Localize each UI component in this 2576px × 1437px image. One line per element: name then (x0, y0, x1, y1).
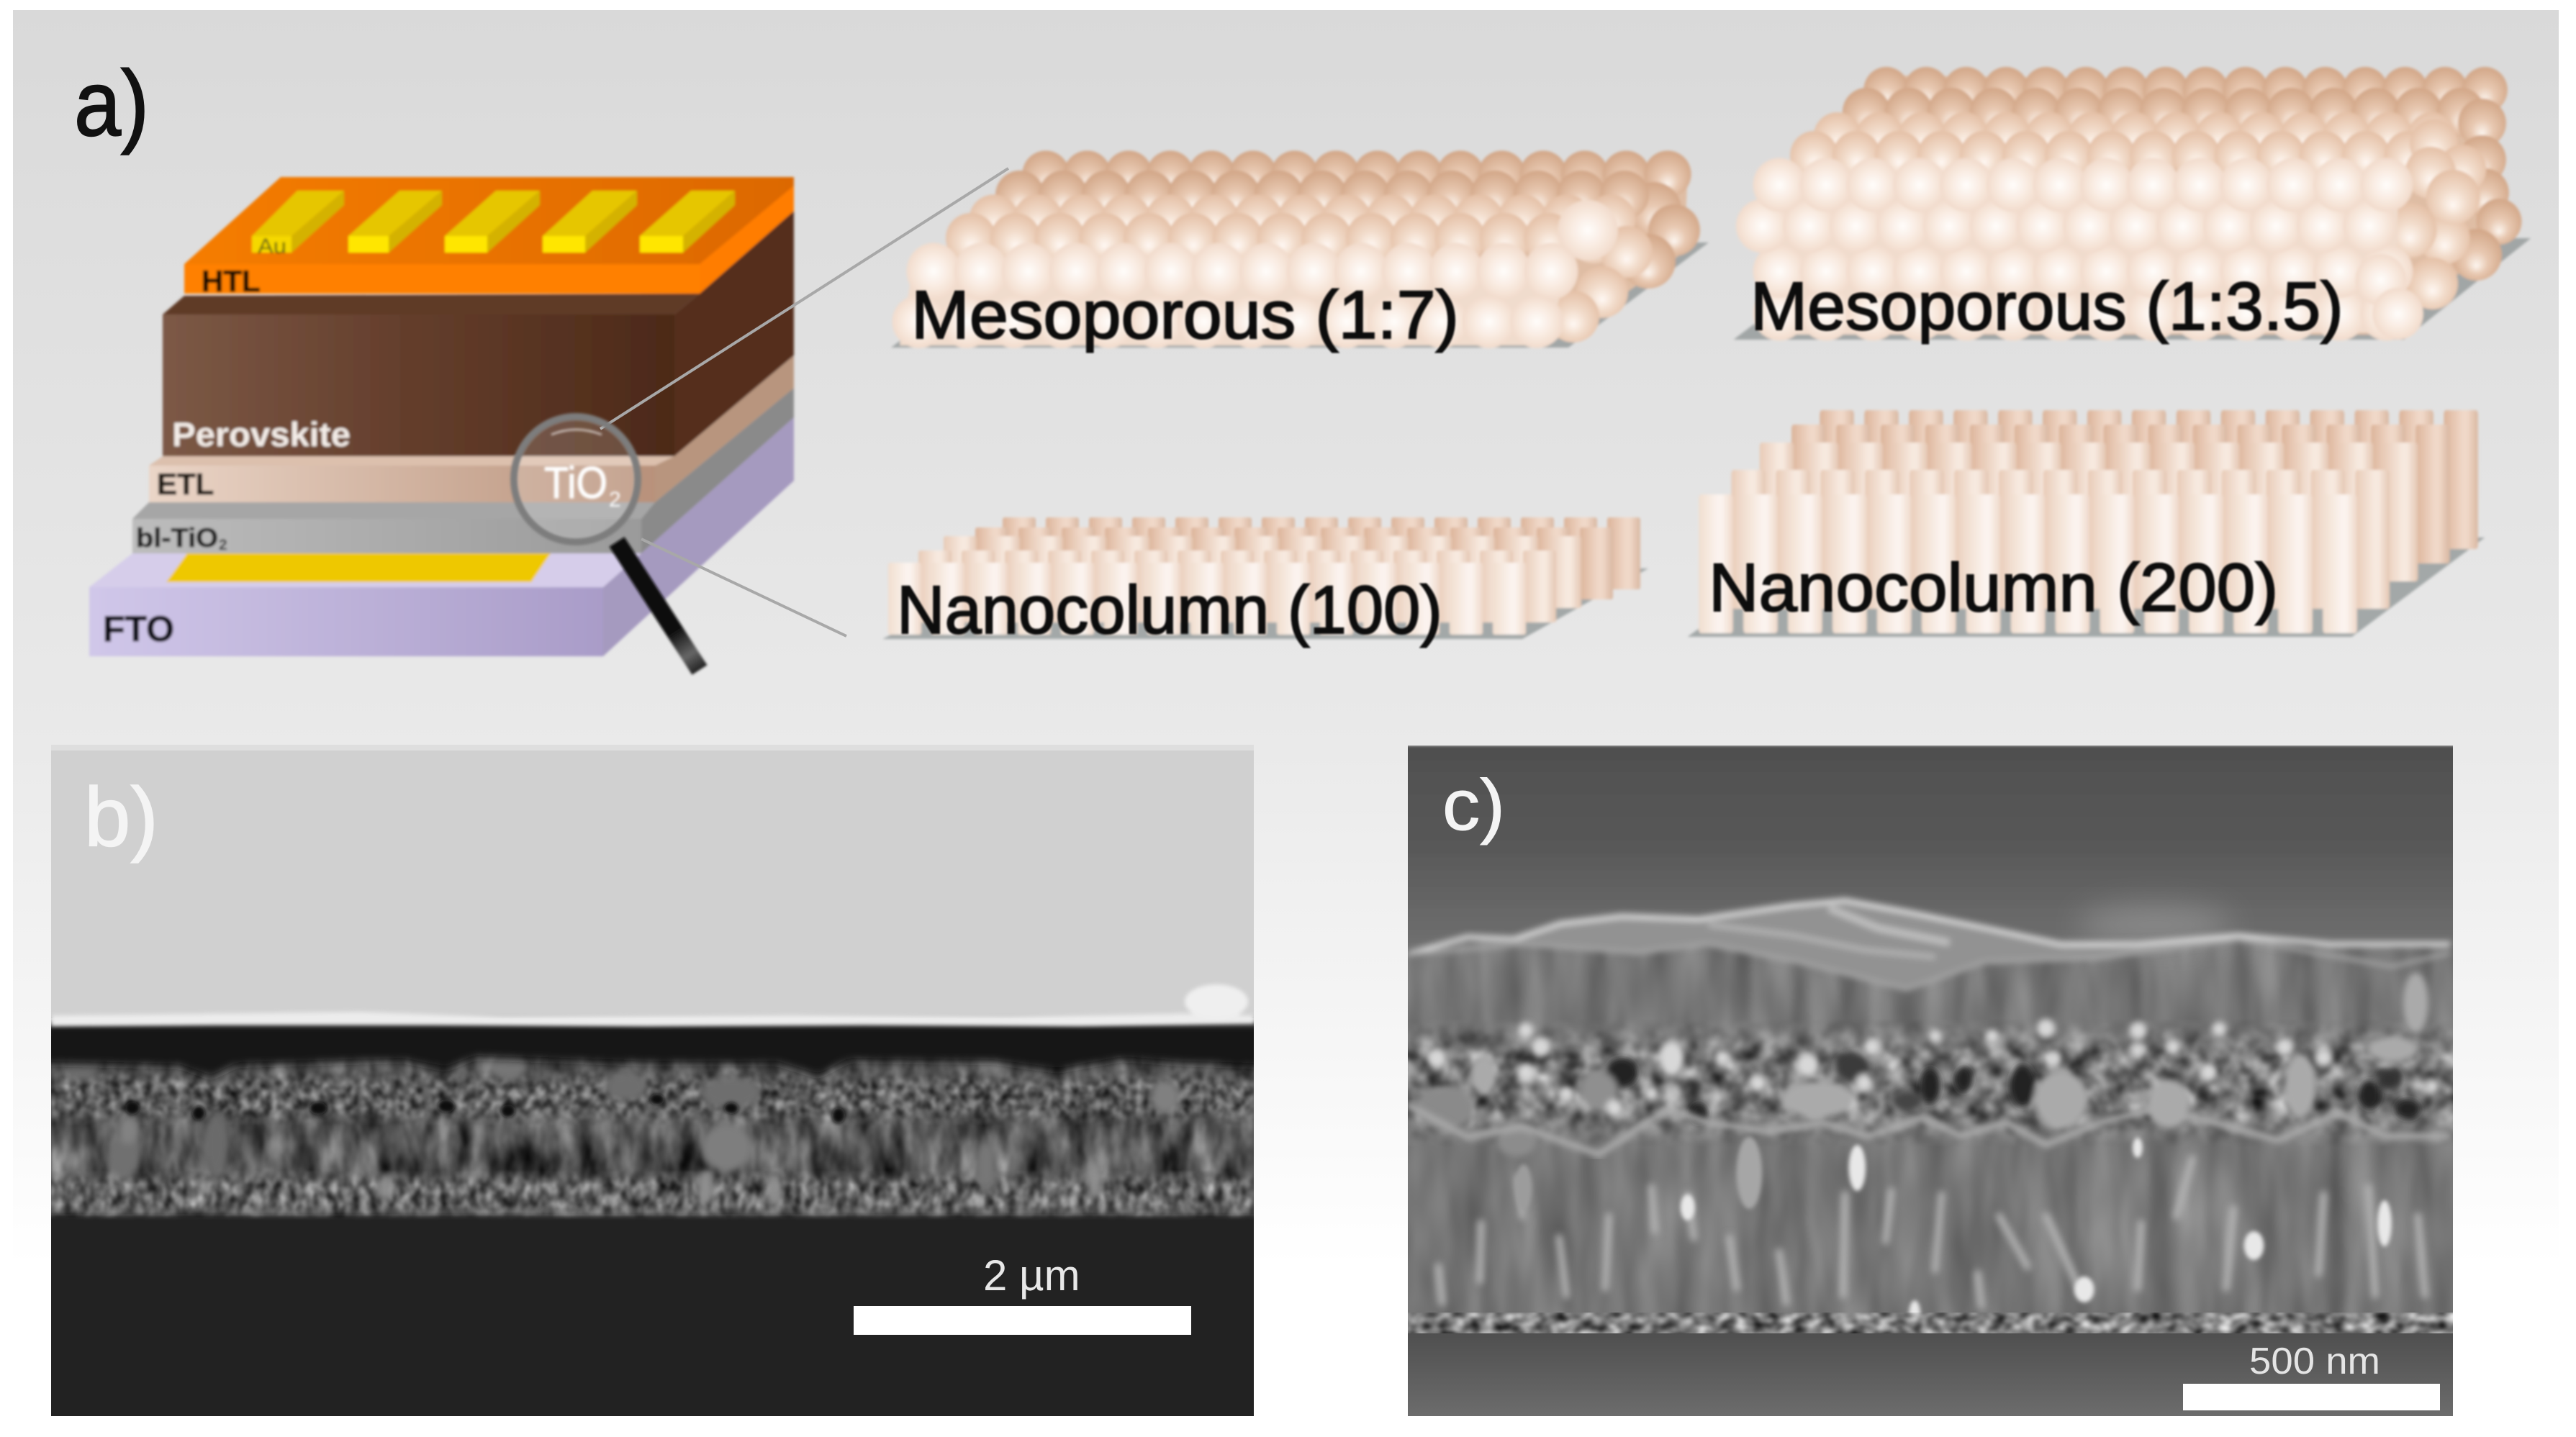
panel label b: b) (84, 770, 158, 863)
bright glow above ridge (2077, 906, 2233, 943)
icon: magnifying glass over TiO2 (514, 417, 700, 670)
layer labels: Perovskite (172, 415, 351, 453)
morphology: Nanocolumn 100 (882, 517, 1648, 648)
dark void band (43, 1022, 1267, 1078)
particle layer (1368, 973, 2503, 1156)
base film (1368, 892, 2503, 1338)
SEM grain (1408, 940, 2453, 1313)
scale label 500 nm: 500 nm (2249, 1341, 2380, 1382)
morphology: Mesoporous 1:7 (891, 150, 1709, 353)
magnifier callout lines (600, 168, 1008, 636)
layer labels: bl-TiO (136, 523, 218, 553)
dark substrate (43, 1216, 1267, 1432)
gold top electrodes (252, 191, 735, 253)
panel a: device schematic and TiO2 morphologies (74, 52, 2531, 670)
morphology: Nanocolumn 200 (1688, 410, 2485, 637)
panel b: SEM cross-section (43, 745, 1267, 1432)
layer: HTL (184, 177, 794, 294)
label: Nanocolumn (100) (897, 572, 1442, 648)
substrate (1368, 1333, 2503, 1416)
bottom gold contact (166, 553, 551, 582)
scale bar c (2183, 1384, 2440, 1410)
layer: FTO (89, 417, 794, 656)
scale label 2 µm: 2 µm (983, 1251, 1080, 1300)
label: Nanocolumn (200) (1709, 549, 2278, 625)
layer labels: 2 (219, 537, 227, 553)
zigzag interface line (1407, 1105, 2451, 1154)
icon: magnifying glass over TiO2: 2 (609, 488, 621, 512)
upper dark vacuum (1368, 745, 2503, 964)
morphology: Mesoporous 1:3.5 (1733, 67, 2531, 344)
layer labels: FTO (103, 609, 174, 649)
beaded compact layer (1368, 1313, 2503, 1336)
upper vacuum region (51, 745, 1254, 1018)
device layer stack (89, 177, 794, 656)
label: Mesoporous (1:3.5) (1750, 268, 2344, 344)
layer labels (103, 235, 351, 649)
layer: bl-TiO2 (132, 388, 794, 553)
top surface ridge (1407, 900, 2451, 989)
icon: magnifying glass over TiO2: TiO (544, 458, 607, 508)
panel label a: a) (74, 52, 149, 155)
label: Mesoporous (1:7) (911, 277, 1459, 353)
layer labels: Au (258, 235, 286, 258)
columnar grain streaks (1439, 1159, 2425, 1306)
panel label c: c) (1442, 765, 1505, 846)
SEM grain layers (51, 1052, 1254, 1220)
bright top rim (51, 984, 1254, 1026)
layer labels: HTL (202, 264, 261, 298)
layer: ETL (149, 355, 794, 502)
layer: perovskite (163, 211, 794, 456)
panel c: SEM cross-section (1368, 745, 2503, 1416)
layer labels: ETL (157, 467, 214, 501)
scale bar b (854, 1306, 1191, 1335)
